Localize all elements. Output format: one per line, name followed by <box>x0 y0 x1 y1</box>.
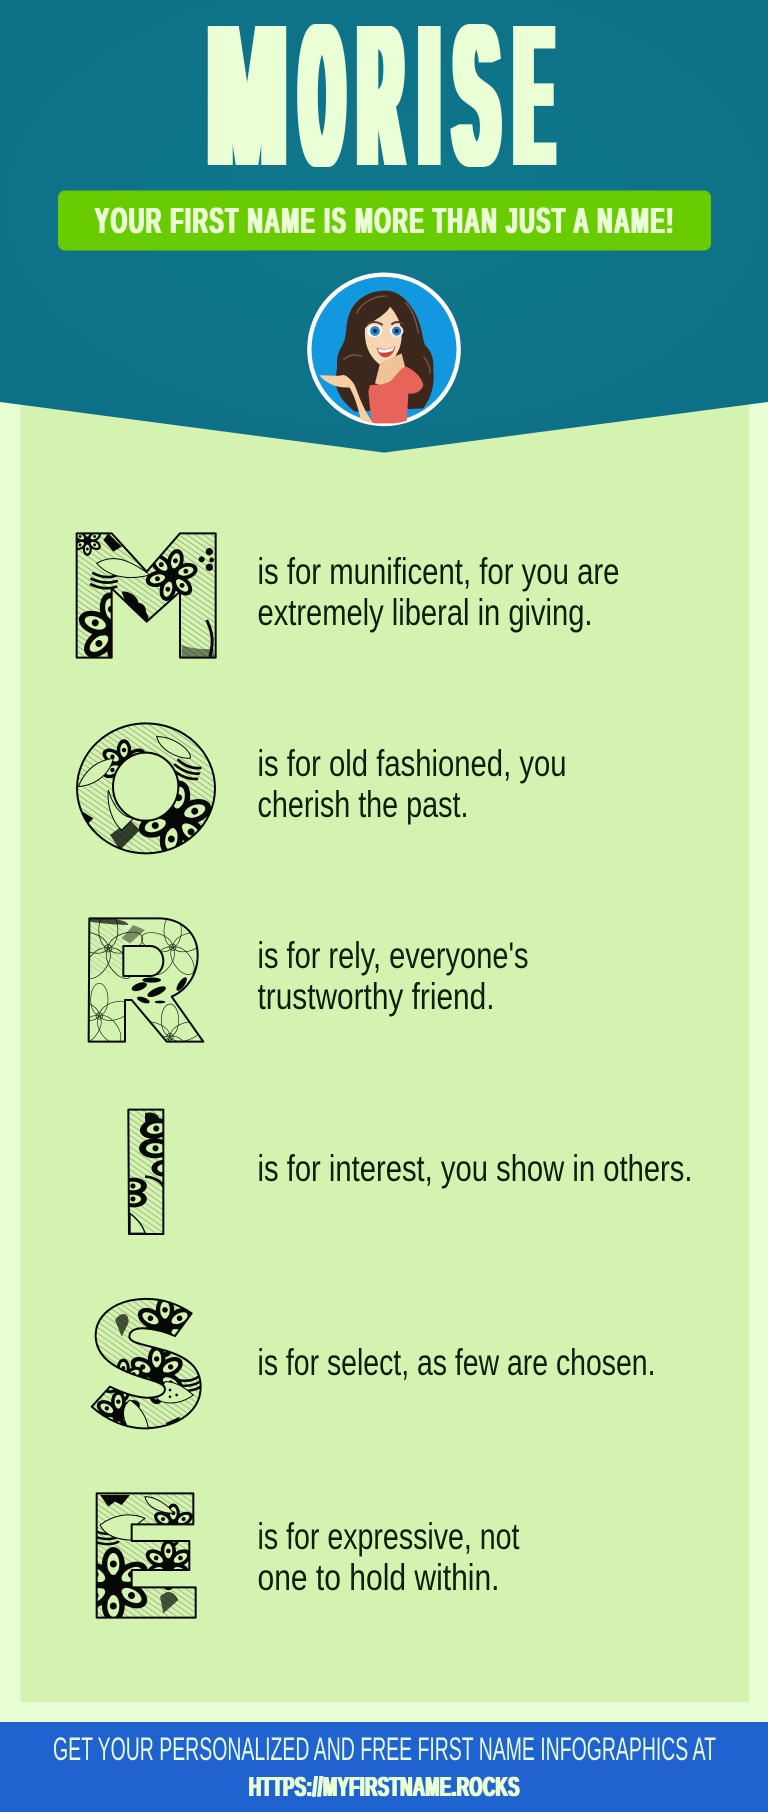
text: letter E line <box>258 1516 520 1598</box>
text: letter R line: trustworthy friend. <box>258 976 494 1017</box>
text: letter R line <box>258 935 528 1017</box>
letter M mandala <box>76 532 217 659</box>
text: letter M line: is for munificent, for you are <box>258 551 620 592</box>
header banner <box>0 0 768 453</box>
text: letter O line: is for old fashioned, you <box>258 743 566 784</box>
tagline bar <box>58 190 711 250</box>
text: letter E line: is for expressive, not <box>258 1516 520 1557</box>
letter S mandala <box>90 1296 203 1439</box>
letter O mandala <box>76 722 216 854</box>
text: letter S line: is for select, as few are chosen. <box>258 1342 656 1383</box>
text: letter R line: is for rely, everyone's <box>258 935 528 976</box>
letter I mandala <box>127 1108 164 1235</box>
text: letter M line <box>258 551 620 633</box>
text: letter O line <box>258 743 566 825</box>
text: letter E line: one to hold within. <box>258 1557 500 1598</box>
letter R mandala <box>88 917 204 1043</box>
text: letter M line: extremely liberal in giving. <box>258 592 592 633</box>
avatar: cartoon woman in circle <box>309 275 459 424</box>
footer <box>0 1722 768 1812</box>
text: letter O line: cherish the past. <box>258 784 468 825</box>
content panel <box>20 395 749 1702</box>
letter E mandala <box>96 1492 197 1619</box>
footer: HTTPS://MYFIRSTNAME.ROCKS <box>249 1771 520 1802</box>
